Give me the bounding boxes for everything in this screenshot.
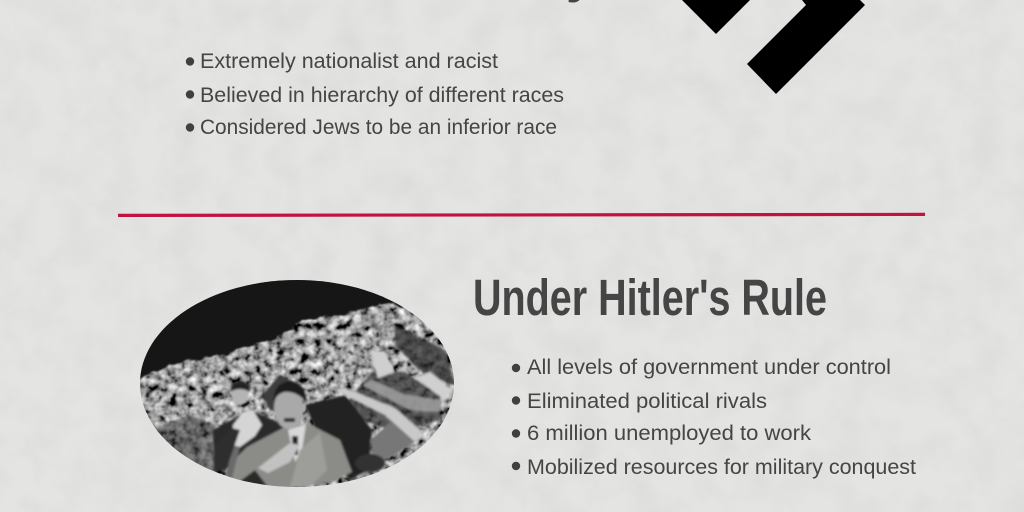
bullet list: under Hitler's rule bbox=[512, 356, 916, 479]
bullet list: under Hitler's rule: All levels of government under control bbox=[527, 356, 891, 379]
bullet list: ideology: Believed in hierarchy of different races bbox=[200, 84, 564, 107]
coat bbox=[227, 423, 352, 490]
bullet list: under Hitler's rule: Mobilized resources for military conquest bbox=[527, 456, 916, 479]
bullet list: ideology: Extremely nationalist and racist bbox=[200, 50, 498, 73]
icon: cropped black diagonal bars at top edge bbox=[682, 0, 865, 94]
heading: Under Hitler's Rule: Under Hitler's Rule bbox=[473, 269, 827, 326]
bullet list: under Hitler's rule: 6 million unemployed to work bbox=[527, 422, 812, 445]
head bbox=[274, 387, 304, 429]
dark background above the crowd bbox=[140, 280, 404, 381]
raised arms bbox=[335, 388, 425, 442]
bullet list: ideology: Considered Jews to be an inferior race bbox=[200, 116, 557, 139]
raised hands bbox=[232, 410, 262, 447]
bullet list: under Hitler's rule: Eliminated political rivals bbox=[527, 390, 767, 413]
photo: saluting crowd in an oval frame bbox=[140, 280, 454, 487]
bullet list: ideology bbox=[186, 50, 564, 139]
